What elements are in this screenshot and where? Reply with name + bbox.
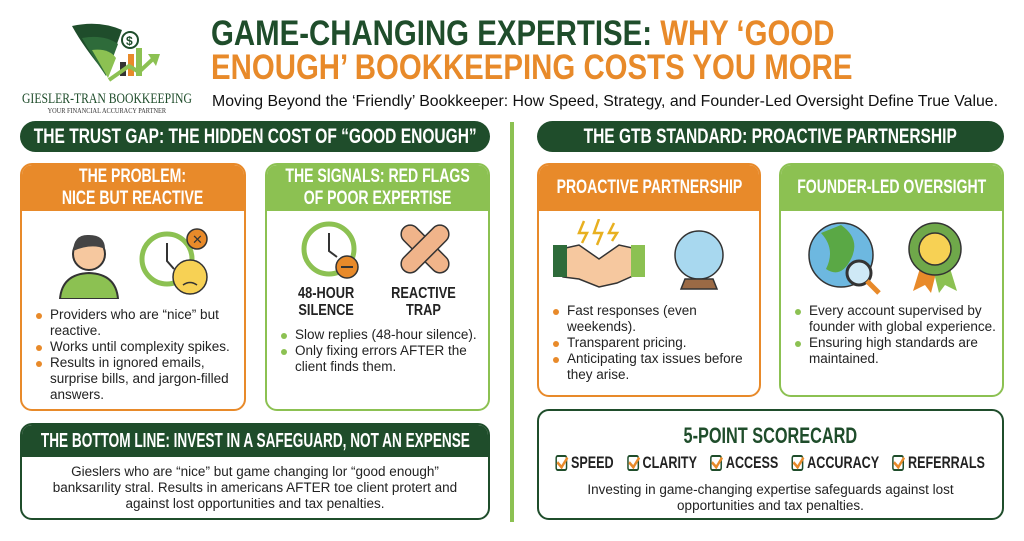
panel: proactive partnership [537, 163, 761, 397]
panel: bottom line [20, 423, 490, 520]
panel: signals [265, 163, 490, 411]
panel: signals: REACTIVE [391, 285, 455, 302]
panel: scorecard: Investing in game-changing expertise safeguards against lost opportunities and tax penalties. [587, 482, 954, 513]
panel: proactive partnership: Transparent pricing. [567, 335, 687, 350]
panel: signals: THE SIGNALS: RED FLAGS [285, 166, 470, 187]
panel: signals: Slow replies (48-hour silence). [295, 327, 477, 342]
panel: proactive partnership: Fast responses (even weekends). [567, 303, 697, 334]
panel: problem: Results in ignored emails, surprise bills, and jargon-filled answers. [50, 355, 229, 402]
panel: problem: NICE BUT REACTIVE [62, 188, 204, 209]
panel: scorecard: SPEED [571, 453, 614, 472]
panel: signals: 48-HOUR [298, 285, 355, 302]
panel: scorecard: 5-POINT SCORECARD [684, 423, 857, 448]
icons: handshake and crystal ball [553, 219, 724, 290]
title [211, 14, 852, 87]
panel: bottom line: Gieslers who are “nice” but game changing lor “good enough” banksarılity stral. Results in americans AFTER toe client protert and against lost opportunities and tax penalties. [53, 464, 457, 511]
panel: signals: OF POOR EXPERTISE [304, 188, 451, 209]
logo [22, 24, 192, 115]
logo: $ [126, 34, 133, 48]
panel: problem: Providers who are “nice” but reactive. [50, 307, 219, 338]
panel: founder-led oversight [779, 163, 1004, 397]
header: GTB standard: THE GTB STANDARD: PROACTIVE PARTNERSHIP [584, 124, 957, 148]
header: trust gap [20, 121, 490, 152]
panel: signals: Only fixing errors AFTER the client finds them. [295, 343, 467, 374]
panel: bottom line: THE BOTTOM LINE: INVEST IN A SAFEGUARD, NOT AN EXPENSE [41, 430, 469, 452]
subtitle: Moving Beyond the ‘Friendly’ Bookkeeper: How Speed, Strategy, and Founder-Led Oversight Define True Value. [212, 93, 998, 110]
divider [510, 122, 514, 522]
title: GAME-CHANGING EXPERTISE: WHY ‘GOOD [211, 14, 834, 53]
panel: scorecard: ACCURACY [808, 453, 879, 472]
icons: globe and badge [808, 222, 962, 295]
panel: problem [20, 163, 246, 411]
panel: founder-led oversight: FOUNDER-LED OVERSIGHT [797, 177, 986, 198]
panel: scorecard: CLARITY [643, 453, 697, 472]
icons: person and clock: ✕ [192, 232, 203, 247]
panel: signals: SILENCE [299, 302, 354, 319]
panel: proactive partnership: Anticipating tax issues before they arise. [567, 351, 743, 382]
header: trust gap: THE TRUST GAP: THE HIDDEN COST OF “GOOD ENOUGH” [34, 124, 476, 148]
panel: scorecard [537, 409, 1004, 520]
panel: scorecard: ACCESS [726, 453, 779, 472]
panel: scorecard: REFERRALS [908, 453, 985, 472]
panel: proactive partnership: PROACTIVE PARTNERSHIP [556, 177, 742, 198]
panel: signals: TRAP [406, 302, 440, 319]
text: YOUR FINANCIAL ACCURACY PARTNER [47, 107, 166, 115]
panel: problem: THE PROBLEM: [79, 166, 186, 187]
icons: person and clock [59, 228, 208, 299]
header: GTB standard [537, 121, 1004, 152]
title: ENOUGH’ BOOKKEEPING COSTS YOU MORE [211, 48, 852, 87]
panel: founder-led oversight: Ensuring high standards are maintained. [809, 335, 978, 366]
panel: founder-led oversight: Every account supervised by founder with global experience. [809, 303, 996, 334]
panel: problem: Works until complexity spikes. [50, 339, 230, 354]
logo: GIESLER-TRAN BOOKKEEPING [22, 91, 191, 107]
icons: clock and bandage [302, 222, 450, 279]
